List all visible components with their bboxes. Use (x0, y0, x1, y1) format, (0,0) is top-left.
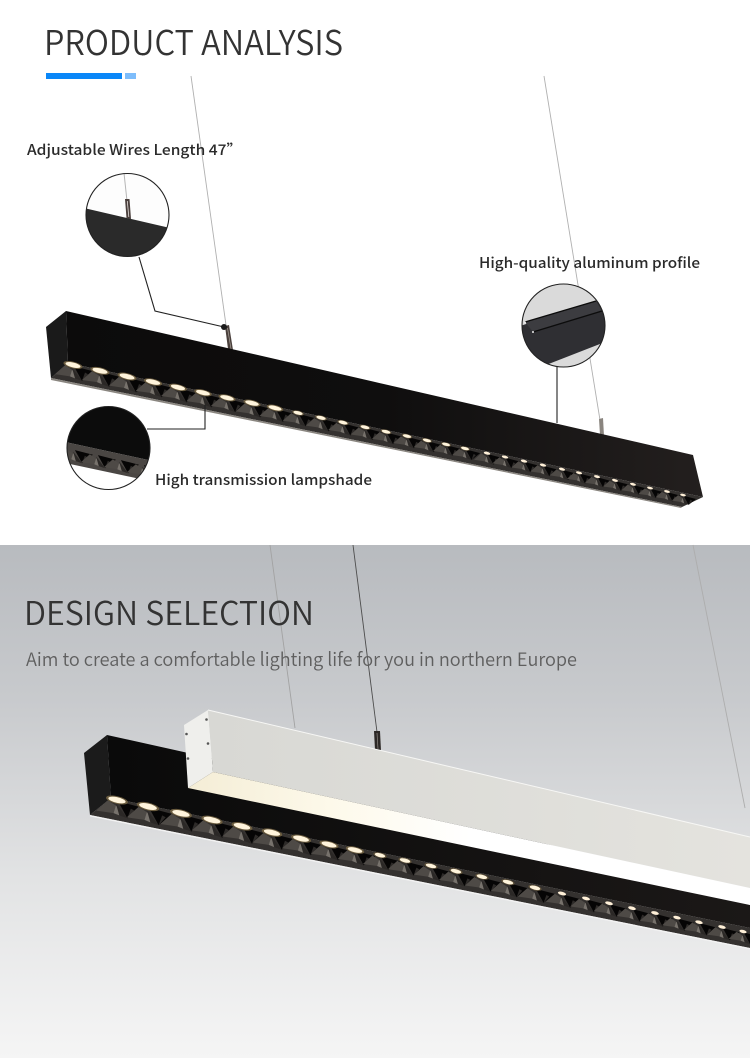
louver lens units (96, 792, 750, 946)
panel: product analysis background (0, 0, 750, 545)
suspension wires (270, 545, 745, 808)
end face (84, 735, 111, 815)
front face (208, 710, 750, 888)
circle outline (86, 174, 169, 256)
white lamp in scene (184, 710, 750, 905)
black lamp in scene (84, 735, 750, 950)
title accent bars (46, 73, 136, 79)
subtitle: Aim to create a comfortable lighting life for you in northern Europe (26, 646, 577, 672)
lamp front face (66, 311, 703, 497)
label: Adjustable Wires Length 47” (27, 139, 242, 160)
title: design selection: DESIGN SELECTION (24, 587, 314, 635)
panel: design selection background (0, 545, 750, 1058)
front face (107, 735, 750, 928)
detail circle: lampshade (68, 407, 150, 478)
suspension wires (191, 76, 600, 420)
louver band (90, 798, 750, 948)
callout leader line (139, 257, 224, 327)
lamp end face (46, 311, 68, 378)
louver lens units (55, 358, 696, 506)
label: High transmission lampshade (155, 469, 372, 490)
label: High-quality aluminum profile (479, 252, 700, 273)
circle outline (522, 284, 605, 367)
louver lower edge (51, 378, 682, 508)
louver lower edge (90, 815, 750, 950)
lamp hanging fixtures (225, 325, 604, 436)
screw details (185, 718, 209, 760)
top edge highlight (208, 710, 750, 837)
callout: adjustable wires (27, 139, 242, 330)
leader dot (221, 324, 227, 330)
lamp louver band (51, 363, 703, 507)
callout: aluminum profile (479, 252, 700, 423)
detail circle: profile corner (522, 284, 604, 366)
callout leader line (556, 367, 558, 423)
callout: lampshade (58, 404, 372, 492)
glowing diffuser (188, 772, 750, 905)
title: product analysis: PRODUCT ANALYSIS (44, 16, 343, 65)
circle outline (67, 406, 150, 490)
detail circle: wire fixture (86, 174, 167, 256)
callout leader line (147, 405, 205, 429)
black linear lamp (46, 311, 703, 508)
hanging fixture (374, 731, 381, 751)
end face (184, 710, 213, 788)
